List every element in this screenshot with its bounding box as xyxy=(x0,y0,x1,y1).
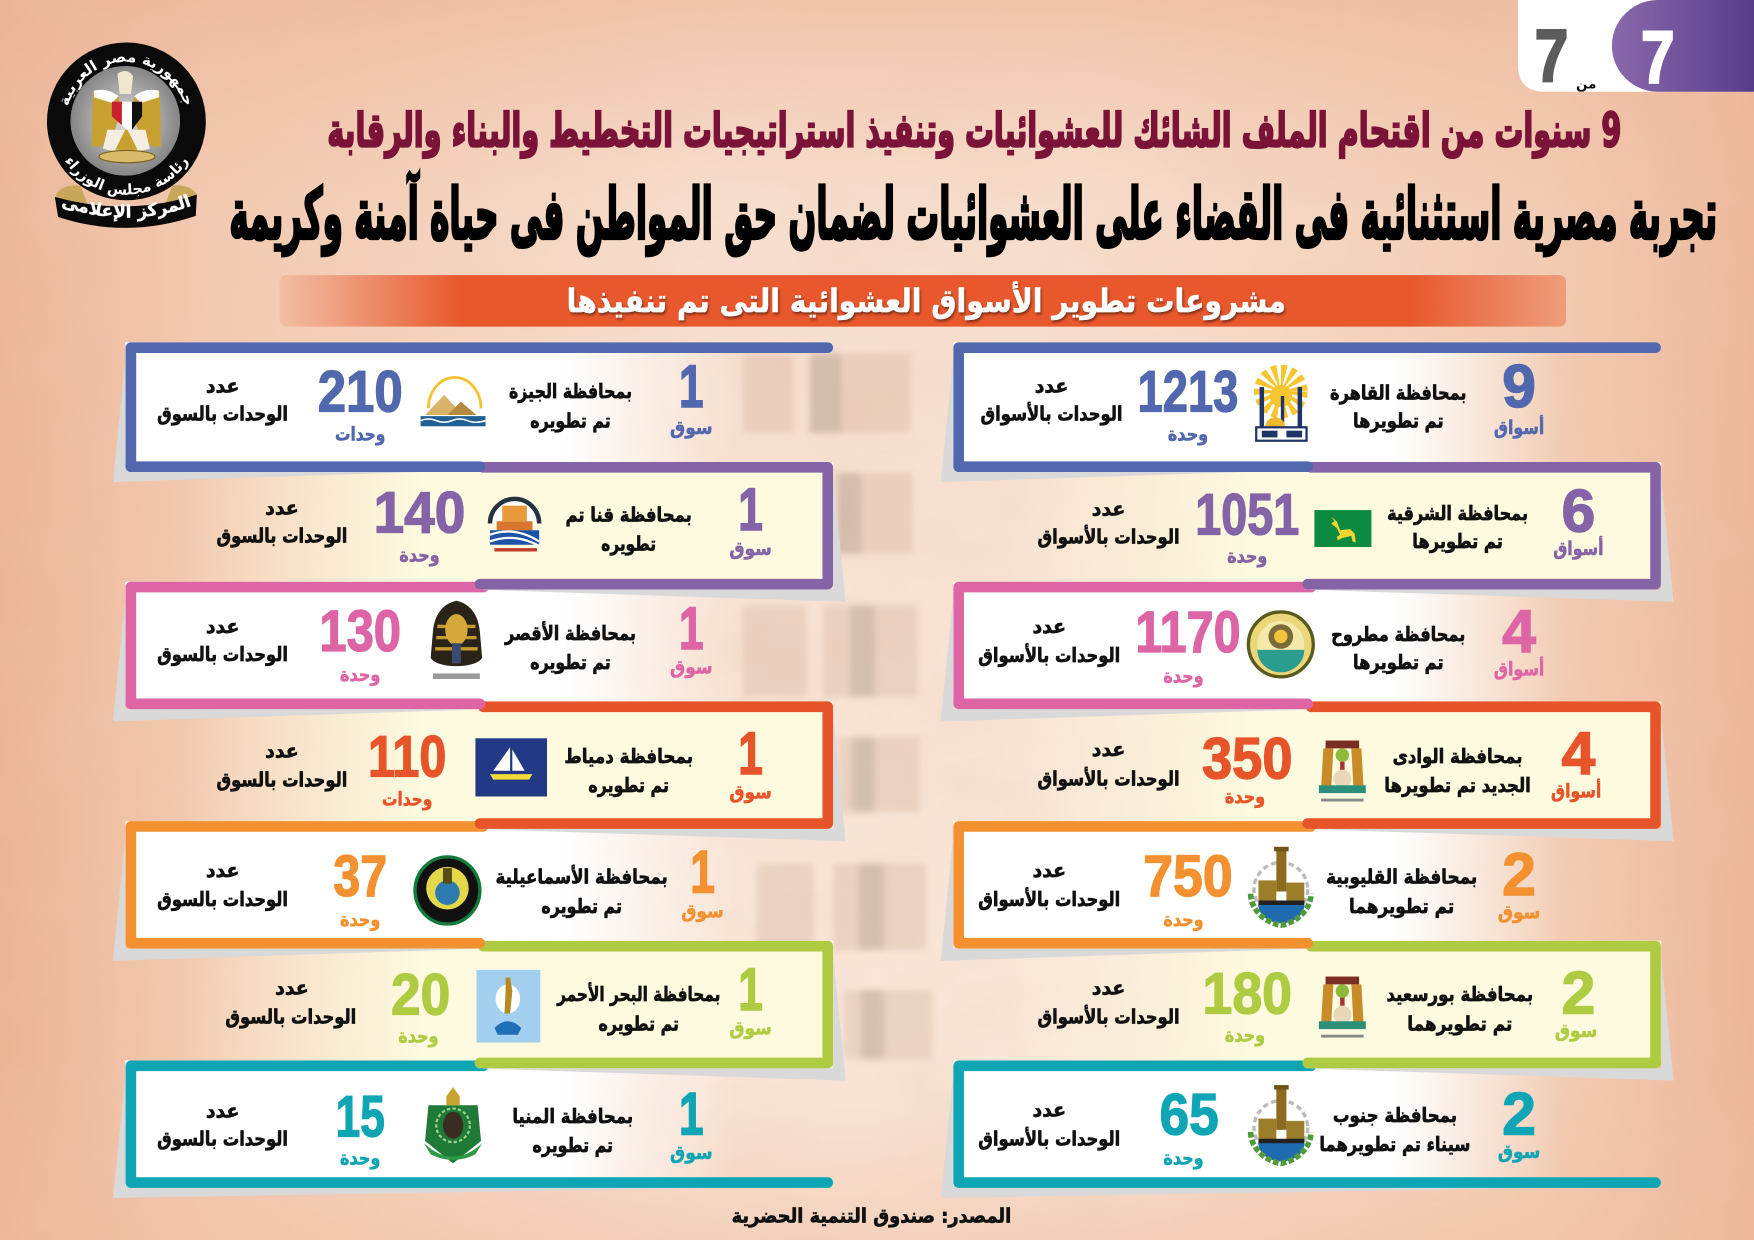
card: Minya: وحدة xyxy=(340,1147,380,1169)
card: Luxor: سوق xyxy=(670,656,713,678)
card: Minya: تم تطويره xyxy=(532,1134,613,1157)
card: Sharqia: 6 xyxy=(1562,476,1595,544)
card: Sharqia: عدد xyxy=(1092,498,1125,521)
card: Sharqia: الوحدات بالأسواق xyxy=(1038,525,1180,549)
card: Qena: عدد xyxy=(265,497,299,520)
logo: New Valley xyxy=(1319,741,1366,801)
card: Damietta: عدد xyxy=(265,739,299,762)
card: Minya: الوحدات بالسوق xyxy=(157,1127,288,1150)
card: Sharqia: وحدة xyxy=(1227,546,1267,568)
card: Luxor: عدد xyxy=(206,615,239,638)
card: Giza: سوق xyxy=(670,417,713,439)
logo: Minya xyxy=(424,1087,482,1163)
logo: Qena xyxy=(490,499,539,551)
card: Qalyubia: تم تطويرهما xyxy=(1349,895,1454,918)
card: Giza: 1 xyxy=(679,352,704,420)
card: Red Sea: سوق xyxy=(729,1018,772,1040)
card: Giza xyxy=(113,342,833,482)
logo: Ismailia xyxy=(415,857,480,924)
card: Minya xyxy=(113,1060,839,1198)
card: Luxor: وحدة xyxy=(340,664,380,686)
card: Ismailia xyxy=(113,821,833,961)
logo: South Sinai xyxy=(1251,1085,1311,1163)
card: Matrouh: تم تطويرها xyxy=(1353,651,1444,674)
card: New Valley: وحدة xyxy=(1225,786,1265,808)
card: South Sinai: الوحدات بالأسواق xyxy=(978,1126,1120,1150)
source note: المصدر: صندوق التنمية الحضرية xyxy=(732,1205,1011,1228)
card: Qalyubia: 750 xyxy=(1143,844,1233,909)
page counter tab xyxy=(1518,0,1754,99)
card: Giza: 210 xyxy=(318,360,403,425)
card: South Sinai: وحدة xyxy=(1163,1147,1204,1169)
card: Ismailia: 1 xyxy=(690,838,715,906)
card: South Sinai: 65 xyxy=(1159,1082,1219,1147)
logo: Cairo xyxy=(1256,376,1307,441)
card: Luxor: 1 xyxy=(679,594,704,662)
card: Port Said: تم تطويرهما xyxy=(1407,1012,1512,1035)
card: Minya: عدد xyxy=(206,1100,239,1123)
card: Ismailia: سوق xyxy=(681,900,724,922)
card: Port Said: عدد xyxy=(1092,976,1125,999)
card: New Valley: 4 xyxy=(1562,719,1596,787)
logo: Luxor mask xyxy=(431,601,482,679)
card: New Valley: الجديد تم تطويرها xyxy=(1384,774,1531,797)
card: Qalyubia: 2 xyxy=(1502,840,1536,908)
card: Damietta: الوحدات بالسوق xyxy=(216,768,347,791)
card: Qena: سوق xyxy=(729,538,772,560)
card: Matrouh: 1170 xyxy=(1135,600,1241,665)
card: Ismailia: وحدة xyxy=(340,909,380,931)
card: Port Said: بمحافظة بورسعيد xyxy=(1387,983,1533,1006)
logo: Port Said xyxy=(1319,977,1366,1038)
section banner: مشروعات تطوير الأسواق العشوائية التى تم تنفيذها xyxy=(567,281,1286,320)
card: Sharqia xyxy=(953,462,1673,602)
card: Matrouh: أسواق xyxy=(1494,657,1544,681)
card: Giza: تم تطويره xyxy=(530,409,611,432)
card: Qalyubia: بمحافظة القليوبية xyxy=(1326,866,1477,889)
logo: Qalyubia xyxy=(1251,847,1311,925)
card: Damietta: 110 xyxy=(368,724,446,789)
emblem: Cabinet media center seal xyxy=(47,42,206,228)
card: Luxor xyxy=(113,582,833,722)
card: South Sinai: سيناء تم تطويرهما xyxy=(1319,1133,1470,1156)
card: South Sinai xyxy=(941,1060,1667,1198)
card: Qalyubia: وحدة xyxy=(1163,909,1204,931)
card: Damietta: وحدات xyxy=(382,788,432,810)
card: Ismailia: بمحافظة الأسماعيلية xyxy=(496,865,668,889)
card: South Sinai: بمحافظة جنوب xyxy=(1333,1104,1457,1127)
card: Qena: الوحدات بالسوق xyxy=(216,525,347,548)
section banner xyxy=(280,275,1566,327)
card: Qena: 1 xyxy=(738,475,763,543)
card: New Valley: بمحافظة الوادى xyxy=(1393,745,1522,768)
card: Luxor: بمحافظة الأقصر xyxy=(504,621,636,645)
card: Red Sea: وحدة xyxy=(398,1026,439,1048)
card: Damietta: تم تطويره xyxy=(588,774,669,797)
card: Port Said: سوق xyxy=(1555,1020,1597,1042)
card: Luxor: 130 xyxy=(319,599,401,664)
logo: Red Sea xyxy=(477,970,540,1043)
logo: Damietta xyxy=(475,738,547,796)
emblem: Cabinet media center seal: رئاسة مجلس الوزراء xyxy=(65,158,189,197)
card: Cairo: بمحافظة القاهرة xyxy=(1330,381,1467,404)
card: Cairo: أسواق xyxy=(1494,415,1544,439)
card: Red Sea: الوحدات بالسوق xyxy=(225,1006,356,1029)
card: Port Said: 2 xyxy=(1562,958,1595,1026)
card: Minya: 1 xyxy=(679,1079,704,1147)
card: Luxor: تم تطويره xyxy=(530,651,611,674)
card: Cairo: 9 xyxy=(1502,352,1536,420)
card: New Valley: الوحدات بالأسواق xyxy=(1038,766,1180,790)
card: Giza: وحدات xyxy=(335,424,385,446)
card: Red Sea: بمحافظة البحر الأحمر xyxy=(556,982,720,1006)
card: South Sinai: 2 xyxy=(1502,1079,1536,1147)
logo: Giza xyxy=(421,377,485,426)
card: Red Sea: تم تطويره xyxy=(598,1012,679,1035)
logo: Sharqia horse xyxy=(1314,510,1371,547)
card: Qena: 140 xyxy=(374,480,465,545)
card: Qalyubia: الوحدات بالأسواق xyxy=(978,887,1120,911)
card: New Valley: أسواق xyxy=(1551,779,1601,803)
card: Minya: سوق xyxy=(670,1142,713,1164)
right column of market cards xyxy=(941,342,1673,1198)
card: Cairo xyxy=(941,342,1661,482)
card: Damietta: سوق xyxy=(729,782,772,804)
card: Cairo: تم تطويرها xyxy=(1353,409,1444,432)
card: South Sinai: سوق xyxy=(1498,1141,1540,1163)
card: Matrouh: بمحافظة مطروح xyxy=(1331,623,1465,646)
card: Port Said: الوحدات بالأسواق xyxy=(1038,1005,1180,1029)
card: Giza: الوحدات بالسوق xyxy=(157,403,288,426)
card: Qena: تطويره xyxy=(601,532,656,555)
card: New Valley xyxy=(953,701,1673,841)
card: Cairo: الوحدات بالأسواق xyxy=(980,402,1123,426)
card: Port Said: 180 xyxy=(1203,961,1292,1026)
card: Minya: 15 xyxy=(336,1085,385,1150)
card: Ismailia: تم تطويره xyxy=(541,895,622,918)
card: Qalyubia: عدد xyxy=(1032,859,1066,882)
card: Sharqia: 1051 xyxy=(1195,483,1299,548)
card: Giza: بمحافظة الجيزة xyxy=(509,380,632,403)
card: Sharqia: تم تطويرها xyxy=(1412,530,1503,553)
card: Red Sea: عدد xyxy=(275,976,309,999)
card: Qena: وحدة xyxy=(399,545,440,567)
card: Damietta xyxy=(125,701,846,841)
card: Port Said: وحدة xyxy=(1225,1024,1265,1046)
card: Ismailia: الوحدات بالسوق xyxy=(157,888,288,911)
page counter tab: 7 xyxy=(1641,16,1675,99)
card: Damietta: بمحافظة دمياط xyxy=(564,745,693,768)
card: Matrouh: الوحدات بالأسواق xyxy=(978,643,1120,667)
card: Red Sea: 20 xyxy=(391,963,450,1028)
card: Red Sea: 1 xyxy=(738,955,763,1023)
card: Matrouh: وحدة xyxy=(1163,665,1204,687)
card: Cairo: 1213 xyxy=(1138,360,1238,425)
card: New Valley: 350 xyxy=(1202,727,1293,792)
card: Matrouh xyxy=(941,582,1661,722)
card: Sharqia: بمحافظة الشرقية xyxy=(1387,502,1528,525)
card: Damietta: 1 xyxy=(738,719,763,787)
card: Minya: بمحافظة المنيا xyxy=(512,1105,633,1128)
card: Qalyubia xyxy=(941,821,1661,961)
emblem: Cabinet media center seal: المركز الإعلامى xyxy=(62,194,191,222)
emblem: Cabinet media center seal: جمهورية مصر العربية xyxy=(62,56,190,106)
card: Ismailia: عدد xyxy=(206,859,239,882)
card: Red Sea xyxy=(125,941,846,1081)
card: Cairo: وحدة xyxy=(1168,424,1208,446)
card: Qalyubia: سوق xyxy=(1498,901,1540,923)
card: Matrouh: 4 xyxy=(1502,597,1536,665)
page counter tab: من xyxy=(1576,77,1596,92)
card: Qena xyxy=(125,462,846,602)
card: Ismailia: 37 xyxy=(333,844,387,909)
card: Sharqia: أسواق xyxy=(1553,536,1604,560)
card: New Valley: عدد xyxy=(1092,738,1125,761)
card: Luxor: الوحدات بالسوق xyxy=(157,643,288,666)
card: South Sinai: عدد xyxy=(1032,1098,1066,1121)
card: Cairo: عدد xyxy=(1035,375,1068,398)
card: Qena: بمحافظة قنا تم xyxy=(565,503,692,526)
left column of market cards xyxy=(113,342,846,1198)
card: Giza: عدد xyxy=(206,375,239,398)
card: Matrouh: عدد xyxy=(1032,615,1066,638)
logo: Matrouh xyxy=(1248,612,1313,677)
card: Port Said xyxy=(953,941,1673,1081)
page counter tab: 7 xyxy=(1535,15,1568,98)
